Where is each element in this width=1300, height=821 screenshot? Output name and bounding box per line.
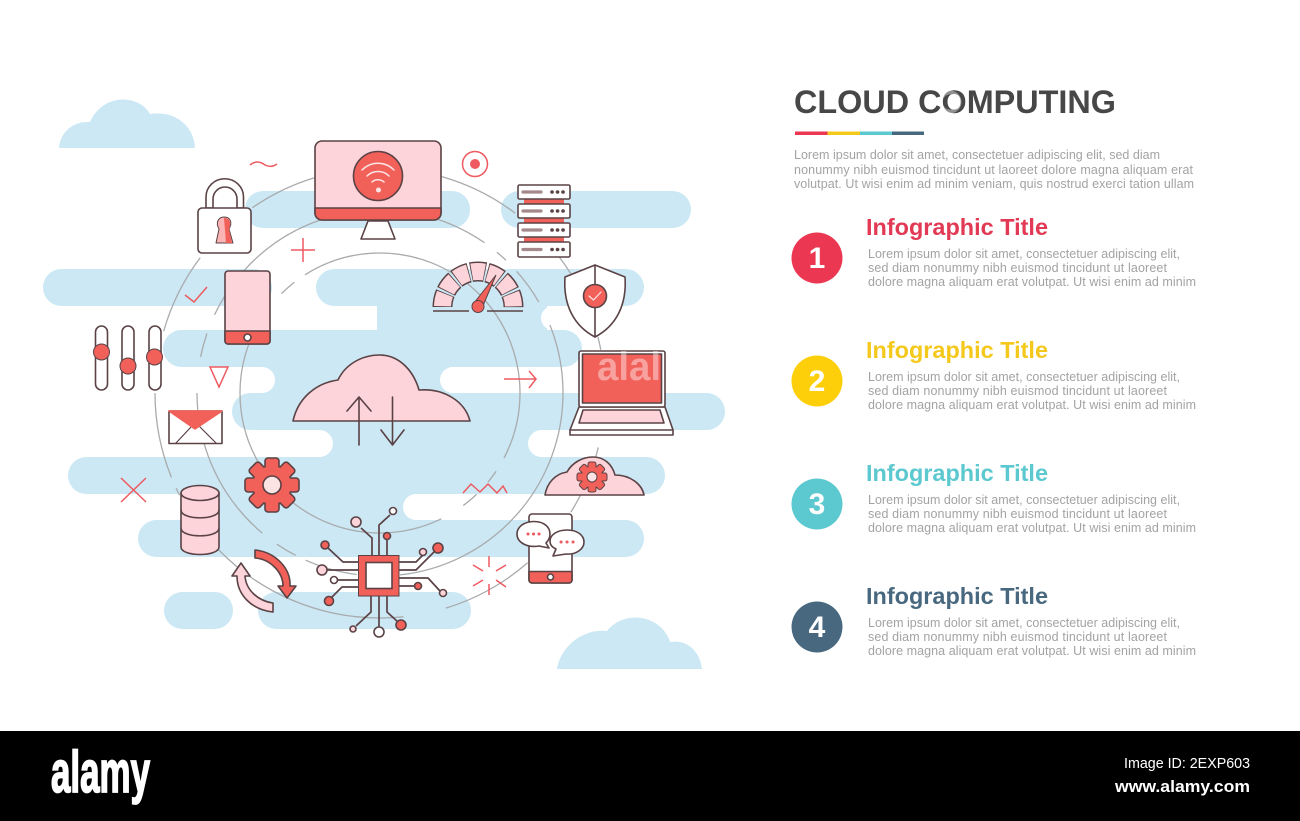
item text 2: dolore magna aliquam erat volutpat. Ut wisi enim ad minim bbox=[868, 398, 1196, 412]
icon: padlock bbox=[198, 179, 251, 253]
icon: cloud with gear bbox=[545, 457, 644, 495]
item text 4: dolore magna aliquam erat volutpat. Ut wisi enim ad minim bbox=[868, 644, 1196, 658]
icon: central cloud with upload and download arrows bbox=[293, 355, 470, 445]
intro paragraph bbox=[794, 148, 1194, 191]
item title 1: Infographic Title bbox=[866, 214, 1048, 240]
title: CLOUD COMPUTING bbox=[794, 84, 1116, 120]
list item 1 bbox=[792, 214, 1196, 289]
item text 2 bbox=[868, 370, 1196, 412]
number badge 4 bbox=[792, 602, 842, 652]
outer ring bbox=[155, 168, 605, 618]
icon: target mark bbox=[462, 152, 488, 176]
icon: zigzag mark bbox=[463, 484, 507, 493]
website: www.alamy.com bbox=[1114, 777, 1250, 796]
icon: arrow mark bbox=[504, 371, 536, 388]
item title 2: Infographic Title bbox=[866, 337, 1048, 363]
item text 4: sed diam nonummy nibh euismod tincidunt ut laoreet bbox=[868, 630, 1168, 644]
list item 3: 3 bbox=[809, 488, 825, 521]
item text 3 bbox=[868, 493, 1196, 535]
item title 4: Infographic Title bbox=[866, 583, 1048, 609]
icon: plus mark bbox=[291, 238, 315, 262]
number badge 2 bbox=[792, 356, 842, 406]
list item 1: 1 bbox=[809, 242, 825, 275]
intro paragraph: Lorem ipsum dolor sit amet, consectetuer adipiscing elit, sed diam bbox=[794, 148, 1160, 162]
icon: envelope bbox=[169, 411, 222, 444]
watermark ring on title bbox=[940, 92, 960, 112]
list item 3 bbox=[792, 460, 1196, 535]
item text 1: sed diam nonummy nibh euismod tincidunt ut laoreet bbox=[868, 261, 1168, 275]
icon: speedometer gauge bbox=[433, 272, 523, 342]
title underline bbox=[795, 132, 924, 135]
icon: sync arrows bbox=[232, 550, 296, 612]
item text 1: dolore magna aliquam erat volutpat. Ut wisi enim ad minim bbox=[868, 275, 1196, 289]
icon: laptop bbox=[570, 351, 673, 435]
icon: triangle mark bbox=[210, 367, 228, 387]
icon: server rack bbox=[518, 185, 570, 257]
watermark on laptop screen: alal bbox=[597, 345, 661, 389]
middle ring bbox=[197, 210, 563, 576]
number badge 3 bbox=[792, 478, 842, 530]
list item 4 bbox=[792, 583, 1196, 658]
item text 3: sed diam nonummy nibh euismod tincidunt ut laoreet bbox=[868, 507, 1168, 521]
footer logo: alamy bbox=[51, 740, 150, 805]
icon: check mark bbox=[185, 287, 207, 302]
icon: cross mark bbox=[121, 478, 146, 502]
icon: gear bbox=[245, 458, 299, 512]
icon: database cylinder bbox=[181, 486, 219, 554]
item text 4: Lorem ipsum dolor sit amet, consectetuer adipiscing elit, bbox=[868, 616, 1180, 630]
icon: monitor with wifi bbox=[315, 141, 441, 239]
white cut-outs between bars bbox=[100, 306, 661, 520]
list item 4: 4 bbox=[809, 611, 826, 644]
item text 2: Lorem ipsum dolor sit amet, consectetuer adipiscing elit, bbox=[868, 370, 1180, 384]
number badge 1 bbox=[792, 232, 842, 284]
item text 2: sed diam nonummy nibh euismod tincidunt ut laoreet bbox=[868, 384, 1168, 398]
intro paragraph: volutpat. Ut wisi enim ad minim veniam, quis nostrud exerci tation ullam bbox=[794, 177, 1194, 191]
intro paragraph: nonummy nibh euismod tincidunt ut laoreet dolore magna aliquam erat bbox=[794, 163, 1194, 177]
icon: sliders bbox=[94, 326, 162, 390]
item text 1 bbox=[868, 247, 1196, 289]
icon: phone with chat bubbles bbox=[517, 514, 584, 583]
inner ring bbox=[240, 253, 520, 533]
footer bar bbox=[0, 731, 1300, 821]
icon: processor chip bbox=[317, 508, 446, 637]
icon: tilde mark bbox=[250, 162, 277, 166]
icon: burst mark bbox=[473, 556, 506, 595]
item text 4 bbox=[868, 616, 1196, 658]
item text 1: Lorem ipsum dolor sit amet, consectetuer adipiscing elit, bbox=[868, 247, 1180, 261]
list item 2 bbox=[792, 337, 1196, 412]
icon: security shield bbox=[565, 265, 625, 337]
list item 2: 2 bbox=[809, 365, 825, 398]
image id: Image ID: 2EXP603 bbox=[1124, 755, 1250, 772]
item text 3: dolore magna aliquam erat volutpat. Ut wisi enim ad minim bbox=[868, 521, 1196, 535]
background clouds and bars bbox=[43, 100, 725, 669]
item text 3: Lorem ipsum dolor sit amet, consectetuer adipiscing elit, bbox=[868, 493, 1180, 507]
icon: tablet bbox=[225, 271, 270, 344]
item title 3: Infographic Title bbox=[866, 460, 1048, 486]
